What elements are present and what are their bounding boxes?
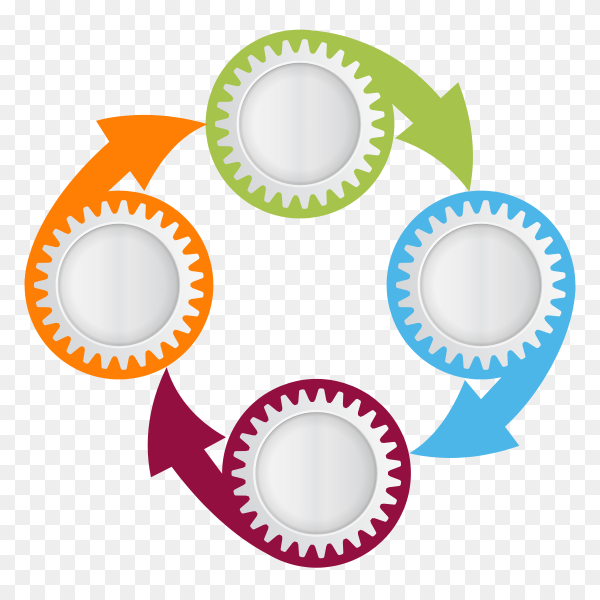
badge: green circle <box>206 30 394 218</box>
icon: blue panel gear <box>391 195 571 375</box>
panel: green gear arrow <box>206 30 473 218</box>
badge: orange circle <box>25 191 213 379</box>
badge: maroon circle <box>222 379 411 568</box>
arrow: green <box>300 30 473 192</box>
badge: blue circle <box>387 191 575 379</box>
panel: maroon gear arrow <box>148 367 411 568</box>
panel: blue gear arrow <box>387 191 576 458</box>
icon: maroon panel gear <box>226 383 406 563</box>
icon: orange panel gear <box>29 195 209 375</box>
arrow: orange <box>25 115 208 285</box>
arrow: blue <box>409 285 576 458</box>
arrow: maroon <box>148 367 316 568</box>
icon: green panel gear <box>210 34 390 214</box>
panel: orange gear arrow <box>25 115 213 379</box>
